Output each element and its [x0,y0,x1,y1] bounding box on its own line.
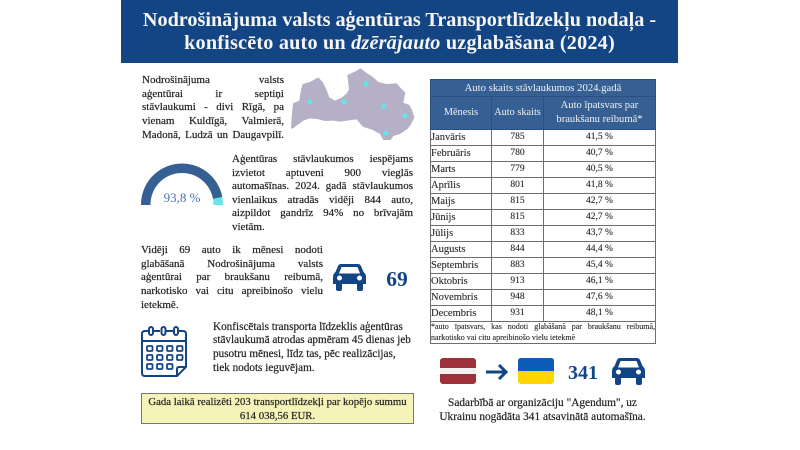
text block: capacity [232,153,413,233]
table: cars in parking lots: 931 [510,308,525,318]
table: cars in parking lots: 47,6 % [586,292,613,302]
table: cars in parking lots: 779 [510,164,525,174]
table: cars in parking lots: 833 [510,228,525,238]
table: cars in parking lots: Mēnesis [444,107,478,118]
text block: capacity: izvietot aptuveni 900 vieglās [232,167,413,179]
icon: Ukrainian flag [518,358,554,384]
text block: monthly cars [141,244,323,311]
table: cars in parking lots: Janvāris [431,132,465,143]
table: cars in parking lots: 844 [510,244,525,254]
map of Latvia [291,68,414,140]
text block: monthly cars: glabāšanā Nodrošinājuma valsts [141,258,323,270]
text block: storage time: stāvlaukumā atrodas apmēram 45 dienas jeb [213,334,411,346]
gauge: 93.8 percent: 93,8 % [164,190,201,205]
table: cars in parking lots: 46,1 % [586,276,613,286]
text block: capacity: vienlaikus atradās vidēji 844 auto, [232,194,413,206]
table: cars in parking lots: 44,4 % [586,244,613,254]
callout: sold vehicles: Gada laikā realizēti 203 transportlīdzekļi par kopējo summu [148,396,407,408]
table: cars in parking lots: 40,7 % [586,148,613,158]
icon: car [333,264,366,291]
table: cars in parking lots: Auto īpatsvars par [561,100,638,111]
icon: car [612,358,645,385]
text block: monthly cars: narkotisko vai citu apreibinošo vielu [141,285,323,297]
text block: capacity: automašīnas. 2024. gadā stāvlaukumos [232,180,413,192]
text block: Ukraine cooperation [439,397,646,423]
table: cars in parking lots: 41,5 % [586,132,613,142]
text block: Ukraine cooperation: Sadarbībā ar organizāciju "Agendum", uz [448,397,637,409]
text block: parking lots: stāvlaukumi - divi Rīgā, pa [142,101,284,113]
text block: monthly cars: ietekmē. [141,299,179,311]
table: cars in parking lots [430,79,656,344]
table: cars in parking lots: 41,8 % [586,180,613,190]
table: cars in parking lots: 42,7 % [586,212,613,222]
title banner [121,0,678,63]
icon: calendar [141,326,187,377]
table: cars in parking lots: 40,5 % [586,164,613,174]
table: cars in parking lots: Jūnijs [431,212,456,223]
title banner: Nodrošinājuma valsts aģentūras Transportlīdzekļu nodaļa - [143,9,656,31]
table: cars in parking lots: 883 [510,260,525,270]
number: 341: 341 [568,362,598,384]
title banner: konfiscēto auto un dzērājauto uzglabāšana (2024) [184,32,615,54]
table: cars in parking lots: 801 [510,180,525,190]
text block: parking lots: vienam Kuldīgā, Valmierā, [142,115,284,127]
text block: capacity: vietām. [232,221,265,233]
icon: Latvian flag [440,358,476,384]
text block: capacity: Aģentūras stāvlaukumos iespējams [232,153,413,165]
table: cars in parking lots: Augusts [431,244,465,255]
number: 69: 69 [386,267,408,291]
table: cars in parking lots: 815 [510,196,525,206]
table: cars in parking lots: Septembris [431,260,478,271]
gauge: 93.8 percent [141,164,223,205]
table: cars in parking lots: 45,4 % [586,260,613,270]
table: cars in parking lots: Februāris [431,148,471,159]
table: cars in parking lots: braukšanu reibumā* [556,114,643,125]
table: cars in parking lots: 42,7 % [586,196,613,206]
text block: monthly cars: aģentūrai par braukšanu reibumā, [141,271,323,283]
table: cars in parking lots: 780 [510,148,525,158]
table: cars in parking lots: 815 [510,212,525,222]
text block: storage time: Konfiscētais transporta līdzeklis aģentūras [213,321,403,333]
table: cars in parking lots: Marts [431,164,456,175]
table: cars in parking lots: 948 [510,292,525,302]
callout: sold vehicles: 614 038,56 EUR. [240,410,315,422]
text block: capacity: aizpildot gandrīz 94% no brīvajām [232,207,413,219]
text block: parking lots: Madonā, Ludzā un Daugavpilī. [142,129,284,141]
table: cars in parking lots: Novembris [431,292,478,303]
table: cars in parking lots: Decembris [431,308,476,319]
table: cars in parking lots: Aprīlis [431,180,460,191]
text block: storage time: pusotru mēnesi, līdz tas, pēc realizācijas, [213,348,396,360]
table: cars in parking lots: Auto skaits [494,107,541,118]
table: cars in parking lots: Jūlijs [431,228,453,239]
callout: sold vehicles [141,393,414,424]
text block: storage time [213,321,411,374]
table: cars in parking lots: 913 [510,276,525,286]
table: cars in parking lots: Oktobris [431,276,468,287]
text block: parking lots: Nodrošinājuma valsts [142,74,284,86]
table: cars in parking lots: Maijs [431,196,455,207]
table: cars in parking lots: 785 [510,132,525,142]
text block: monthly cars: Vidēji 69 auto ik mēnesi nodoti [141,244,323,256]
text block: parking lots [142,74,284,141]
arrow [486,364,508,380]
table: cars in parking lots: 43,7 % [586,228,613,238]
table: cars in parking lots: *auto īpatsvars, kas nodoti glabāšanā par braukšanu reibumā, narkotisko vai citu apreibinošo vielu ietekmē [431,322,655,342]
table: cars in parking lots: 48,1 % [586,308,613,318]
text block: Ukraine cooperation: Ukrainu nogādāta 341 atsavinātā automašīna. [439,411,646,423]
map dots [308,81,408,136]
table: cars in parking lots: Auto skaits stāvlaukumos 2024.gadā [465,82,621,94]
text block: parking lots: aģentūrai ir septiņi [142,88,284,100]
text block: storage time: tiek nodots ieguvējam. [213,362,315,374]
